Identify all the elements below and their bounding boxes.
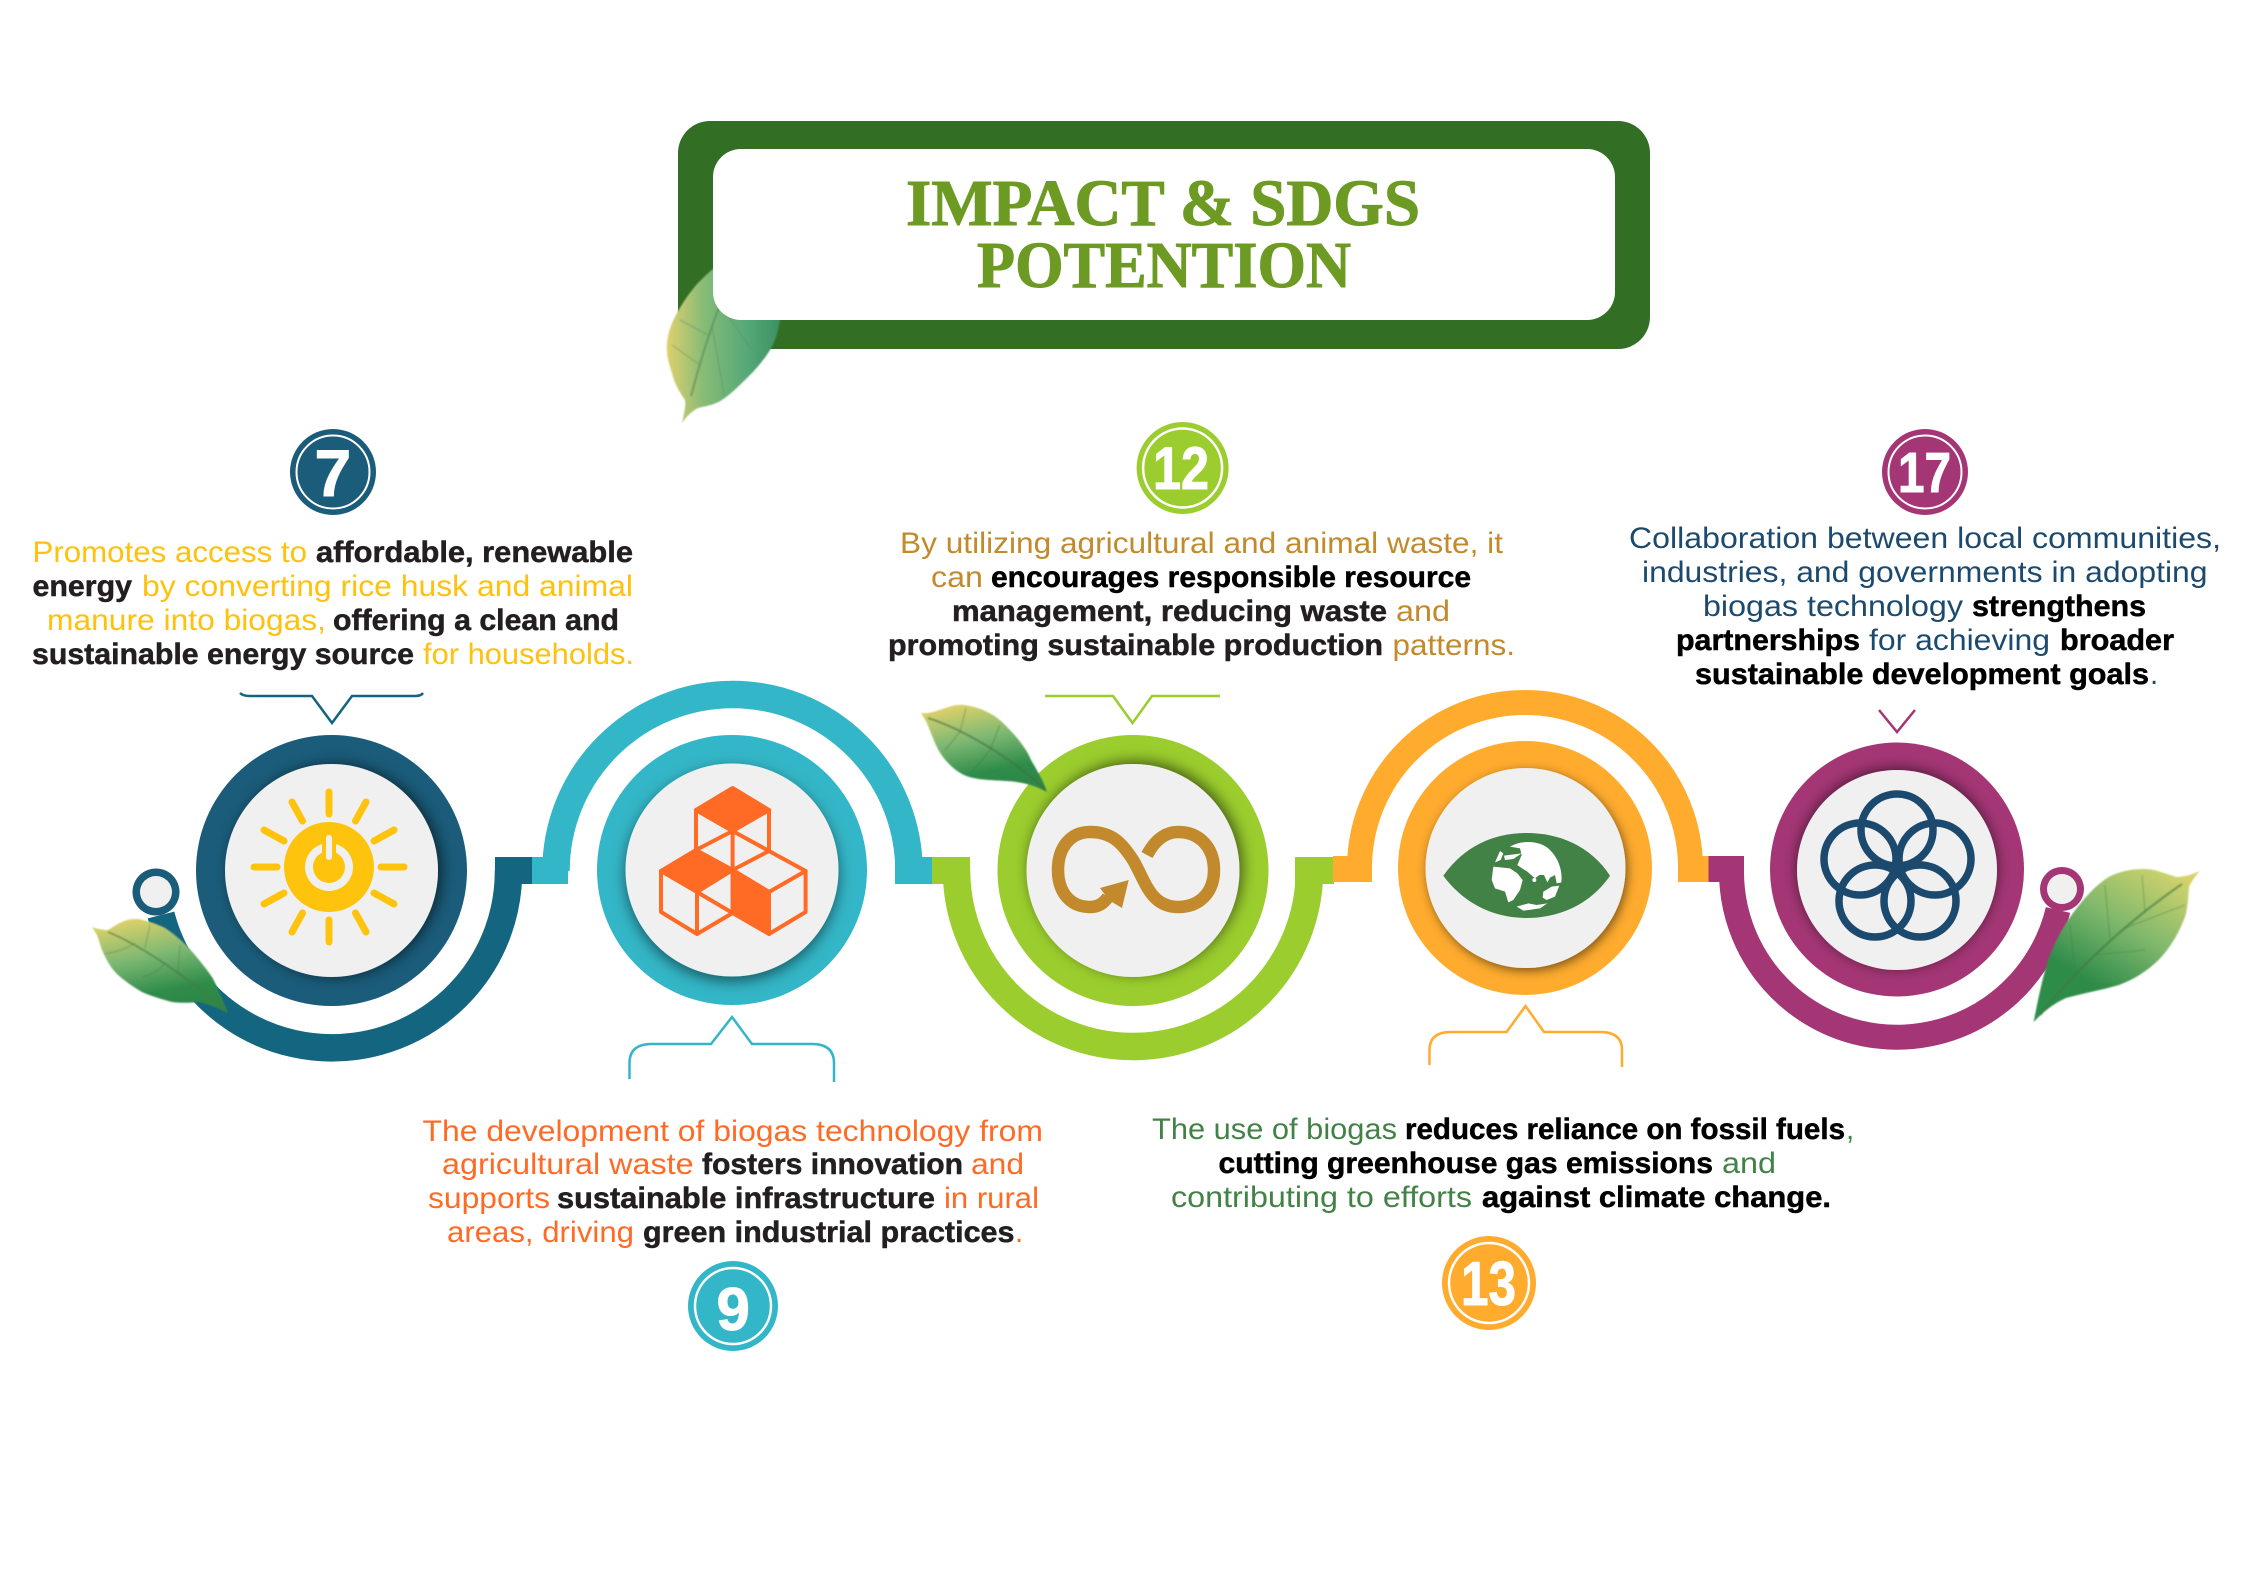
text block: SDG 7: manure into biogas, [47, 604, 326, 637]
panel: SDG 9 medallion [597, 735, 867, 1005]
number badge 7: 7 [314, 436, 351, 510]
panel: SDG 12 medallion [998, 735, 1268, 1006]
icon: infinity loop with arrow [1058, 832, 1214, 908]
text block: SDG 12: can [931, 561, 983, 594]
text block: SDG 12: management, reducing waste [952, 595, 1387, 628]
text block: SDG 13: cutting greenhouse gas emissions [1218, 1147, 1713, 1180]
text block: SDG 7: Promotes access to [32, 536, 307, 569]
text block: SDG 17: partnerships [1676, 624, 1860, 657]
text block: SDG 17: Collaboration between local communities, [1629, 522, 2221, 555]
text block: SDG 17: . [2150, 658, 2158, 691]
icon: five overlapping rings [1824, 794, 1971, 937]
text block: SDG 17: biogas technology [1703, 590, 1963, 623]
text block: SDG 13: , [1846, 1113, 1854, 1146]
text block: SDG 13 [1152, 1113, 1854, 1214]
text block: SDG 7: sustainable energy source [32, 638, 414, 671]
text block: SDG 17: sustainable development goals [1695, 658, 2149, 691]
icon: leaf on SDG 12 ring [921, 705, 1047, 792]
number badge 12: 12 [1153, 435, 1209, 502]
text block: SDG 17: broader [2060, 624, 2175, 657]
text block: SDG 9: and [971, 1148, 1024, 1181]
text block: SDG 9: agricultural waste [442, 1148, 694, 1181]
text block: SDG 12 [888, 527, 1515, 662]
text block: SDG 7: affordable, renewable [316, 536, 633, 569]
text block: SDG 7 [32, 536, 634, 671]
icon: leaf right [2034, 869, 2200, 1022]
text block: SDG 9: in rural [944, 1182, 1039, 1215]
number badge 9: 9 [716, 1276, 750, 1343]
number badge 7 [290, 429, 376, 515]
track: SDG 9 arch [532, 694, 932, 884]
end ring left [132, 868, 180, 916]
text block: SDG 9: areas, driving [447, 1216, 634, 1249]
text block: SDG 7: offering a clean and [333, 604, 619, 637]
number badge 13: 13 [1461, 1250, 1516, 1319]
icon: eye with globe [1443, 833, 1610, 918]
connector tracks [161, 694, 2058, 1048]
callout pointer: SDG 17 [1879, 710, 1915, 732]
text block: SDG 9: green industrial practices [643, 1216, 1014, 1249]
panel: SDG 13 medallion [1398, 741, 1652, 995]
icon: leaf left [92, 919, 228, 1013]
text block: SDG 13: contributing to efforts [1171, 1181, 1472, 1214]
text block: SDG 9: The development of biogas technology from [422, 1115, 1043, 1148]
heading: POTENTION [977, 229, 1351, 302]
icon: sun with power symbol [254, 792, 404, 942]
icon: leaf behind title box [667, 268, 782, 423]
track: SDG 12 U-shape [932, 857, 1334, 1046]
track: SDG 17 U-shape [1708, 856, 2058, 1037]
panel: SDG 17 medallion [1770, 742, 2024, 996]
callout bracket: SDG 9 [630, 1017, 834, 1082]
heading: IMPACT & SDGS [906, 167, 1420, 240]
text block: SDG 12: encourages responsible resource [991, 561, 1471, 594]
text block: SDG 12: patterns. [1392, 629, 1515, 662]
text block: SDG 9: sustainable infrastructure [557, 1182, 935, 1215]
heading [906, 167, 1420, 302]
text block: SDG 7: by converting rice husk and animal [142, 570, 633, 603]
number badge 13 [1442, 1236, 1536, 1330]
text block: SDG 13: The use of biogas [1152, 1113, 1397, 1146]
track: SDG 13 arch [1333, 702, 1709, 882]
text block: SDG 7: for households. [423, 638, 634, 671]
number badge 12 [1137, 422, 1229, 514]
text block: SDG 13: and [1722, 1147, 1776, 1180]
callout bracket: SDG 13 [1430, 1006, 1622, 1067]
text block: SDG 12: and [1396, 595, 1450, 628]
text block: SDG 9: supports [428, 1182, 550, 1215]
number badge 17: 17 [1898, 441, 1951, 505]
panel: SDG 7 medallion [196, 735, 467, 1006]
text block: SDG 17: for achieving [1869, 624, 2050, 657]
text block: SDG 12: By utilizing agricultural and animal waste, it [900, 527, 1503, 560]
text block: SDG 9: fosters innovation [702, 1148, 963, 1181]
text block: SDG 13: reduces reliance on fossil fuels [1405, 1113, 1845, 1146]
text block: SDG 17: strengthens [1972, 590, 2146, 623]
text block: SDG 17 [1629, 522, 2221, 691]
callout bracket: SDG 12 [1045, 696, 1220, 723]
end ring right [2040, 867, 2084, 911]
text block: SDG 9 [422, 1115, 1043, 1249]
text block: SDG 13: against climate change. [1482, 1181, 1831, 1214]
text block: SDG 7: energy [32, 570, 133, 603]
number badge 17 [1882, 429, 1968, 515]
icon: stacked cubes [661, 788, 806, 934]
text block: SDG 12: promoting sustainable production [888, 629, 1383, 662]
number badge 9 [688, 1261, 778, 1351]
title banner [667, 121, 1650, 423]
text block: SDG 17: industries, and governments in adopting [1642, 556, 2208, 589]
text block: SDG 9: . [1015, 1216, 1023, 1249]
callout bracket: SDG 7 [240, 693, 423, 723]
track: SDG 7 U-shape [161, 857, 532, 1048]
